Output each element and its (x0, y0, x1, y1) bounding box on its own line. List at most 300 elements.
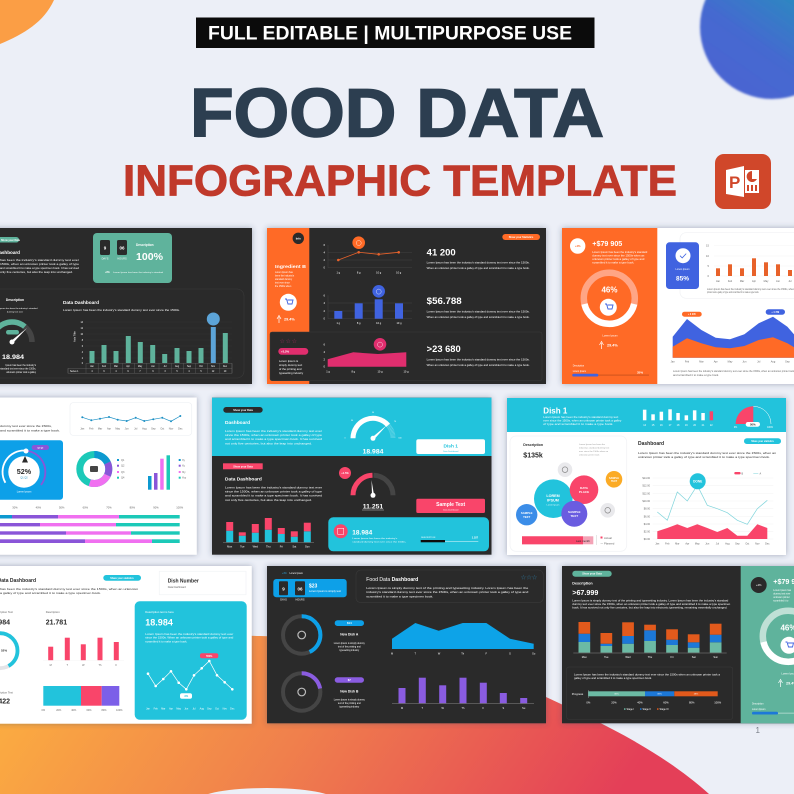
line chart panel: Mar (98, 428, 102, 430)
stacked bar chart: Thu (648, 655, 653, 659)
bar chart: 0 (323, 316, 325, 320)
slide 5: cyan and dark gauges (212, 398, 492, 555)
card: dish number (159, 571, 246, 595)
bar chart: data dashboard: Data Dashboard (63, 300, 99, 305)
area chart: Sep (785, 360, 790, 364)
stacked progress bar: 0% (41, 709, 46, 712)
combined area and line chart: $4.00 (644, 523, 651, 526)
bar chart: data dashboard: Jan (90, 366, 95, 368)
cyan text block: since the 1500s, when an unknown printer took a galley of type (225, 433, 323, 437)
orange side panel: 29.4% (607, 344, 618, 348)
bar chart panel: May (764, 280, 769, 283)
dish A text (334, 620, 366, 652)
stacked bar chart: Sun (305, 544, 310, 548)
small status line: +4% (282, 573, 287, 575)
pink gauge (339, 467, 393, 510)
cyan line chart card: Jun (184, 708, 189, 710)
small status line (282, 572, 303, 575)
green KPI card: HOURS (117, 256, 127, 260)
statistic 23 680: >23 680 (427, 344, 461, 354)
cyan header band: 17 (669, 424, 672, 427)
gauge block: dummy text ever (7, 310, 23, 314)
bar chart: data dashboard: Apr (126, 365, 130, 368)
bar chart: data dashboard: 4 (91, 371, 93, 373)
bar chart: data dashboard: 12 (212, 371, 215, 373)
bar chart: data dashboard: Aug (175, 365, 180, 368)
paragraph (0, 259, 80, 274)
outlined heading panel: industry's standard dummy text ever since the 1500s, when an unknown printer took a galley of type and (366, 590, 529, 594)
tag pill (0, 237, 21, 242)
card: sample text: Sample Text (436, 502, 466, 508)
progress panel: Lorem Ipsum has been the industry's standard dummy text ever since the 1500s when an unknown printer took a (574, 674, 721, 676)
green side panel: Lorem Ipsum has (773, 589, 792, 592)
paragraph (0, 425, 60, 432)
line chart: 1 g (336, 270, 341, 274)
dark text block: Lorem Ipsum has been the industry's standard dummy text ever (225, 486, 322, 490)
dish B text (334, 677, 366, 708)
left statistic and donut: 52% (1, 648, 7, 652)
bar chart: data dashboard: Oct (199, 365, 203, 368)
description text (572, 582, 731, 610)
bubble: lorem ipsum: LOREM (546, 494, 560, 498)
green KPI card: Lorem Ipsum has been the industry's standard (113, 271, 163, 274)
progress panel: Stage III (660, 708, 669, 711)
cyan header band: 14 (643, 424, 647, 427)
stacked bar chart: 100% (176, 506, 184, 510)
progress panel: galley of type and scrambled it to make a type specimen book. (574, 677, 652, 680)
outlined heading panel: Food Data Dashboard (366, 577, 418, 583)
line chart: 10 g (376, 270, 382, 274)
area chart: S (509, 652, 511, 656)
stacked bar chart: Mon (227, 544, 233, 548)
stacked bar chart: 80% (130, 506, 136, 510)
bar chart: Th (462, 707, 465, 710)
area chart: Mar (699, 360, 704, 364)
outlined heading panel: ☆☆☆ (520, 574, 538, 582)
bar chart: data dashboard: 6 (103, 371, 105, 373)
blue gauge card: 52% (17, 467, 32, 476)
cyan KPI card: standard dummy text ever since the 1500s. (352, 540, 407, 544)
pink tag (223, 463, 263, 469)
slide 3: orange donut with bar and area charts (562, 228, 794, 384)
cyan header band: ever since the 1500s, when an unknown printer took a galley (543, 420, 622, 422)
bubble: amber sample text: TEXT (611, 480, 618, 483)
line chart panel: Jan (80, 428, 85, 430)
cyan header band: of type and scrambled it to make a type book. (543, 423, 614, 426)
heading and paragraph: Share your statistics (110, 577, 134, 580)
gauge block (0, 298, 38, 374)
gauge: 0% (734, 427, 737, 429)
bar chart: data dashboard: 7 (139, 371, 141, 373)
dark text block: not only five centuries, but also the leap into unchanged. (225, 498, 312, 502)
statistic 56.788: $56.788 (427, 296, 462, 306)
progress panel: Stage II (642, 708, 651, 711)
outlined heading panel (356, 570, 543, 603)
progress panel: 60% (663, 700, 669, 704)
description text: >67.999 (572, 590, 598, 597)
blue countdown card: Lorem Ipsum is simply text (309, 590, 341, 593)
cyan line chart card: Jan (146, 708, 151, 710)
orange side panel (562, 228, 657, 384)
bubble: lorem ipsum (534, 479, 573, 518)
orange side panel (267, 228, 309, 384)
stacked bar chart (223, 518, 314, 548)
blue KPI card (666, 242, 699, 289)
bar chart: data dashboard: Jul (164, 366, 167, 368)
decorative blue corner blob (700, 0, 794, 99)
area chart: 2 (323, 358, 325, 362)
orange side panel: standard dummy (275, 278, 293, 281)
blue gauge card: Q1 Q2 (37, 448, 44, 450)
orange side panel: dummy text ever since the 1500s when an (592, 254, 645, 258)
combined area and line chart: Jan (655, 542, 660, 546)
bar chart: data dashboard: Axis Title (72, 331, 76, 342)
green side panel: unknown printer (773, 596, 790, 599)
cyan header band: 16 (660, 424, 663, 427)
cyan KPI card (328, 517, 489, 551)
area chart: 6 (323, 342, 325, 346)
line chart panel: Aug (142, 428, 147, 430)
combined area and line chart: Apr (685, 542, 689, 546)
stacked bar chart: Fri (670, 655, 674, 659)
white gauge (344, 412, 403, 456)
donut chart (584, 273, 635, 324)
combined area and line chart: Aug (725, 542, 730, 546)
green side panel: Lorem Ipsum (752, 708, 765, 711)
cyan line chart card: Oct (215, 708, 219, 710)
bubble: lorem ipsum: IPSUM (547, 498, 559, 502)
tag pill: Show your Data (1, 239, 21, 242)
white gauge: 100 (398, 438, 403, 440)
stacked progress bar (41, 686, 123, 712)
stacked bar chart: 90% (153, 506, 159, 510)
area chart: Jan (671, 360, 675, 364)
bubbles card: industry's standard dummy text (579, 446, 610, 450)
small bar chart (148, 455, 187, 490)
pink tag: Show your Data (233, 464, 253, 468)
stacked bar chart: Tue (604, 655, 609, 659)
bar chart: data dashboard: 6 (82, 346, 84, 348)
green tag: Show your Data (582, 572, 602, 576)
combined area and line chart: $2.00 (644, 531, 651, 534)
progress bar: Last month (576, 539, 590, 543)
bar chart: data dashboard: 4 (188, 371, 190, 373)
line chart (323, 236, 412, 274)
small bar chart: Xiy (182, 471, 186, 474)
cyan KPI card: DESCRIPTION (421, 537, 436, 539)
gauge: 50% (750, 422, 756, 426)
top banner: FULL EDITABLE | MULTIPURPOSE USE (208, 22, 572, 44)
stacked bar chart: Mon (582, 655, 587, 659)
progress bar: Actual (604, 536, 612, 540)
area chart: 10 g (377, 370, 383, 374)
gauge block: Ipsum has been the industry's (6, 364, 37, 367)
line chart: 8 g (357, 270, 361, 274)
combined area and line chart: Mar (675, 542, 680, 546)
bar chart: 8 g (357, 321, 361, 325)
combined area and line chart: Oct (745, 542, 750, 546)
area chart: Su (532, 652, 536, 656)
blue countdown card (273, 579, 347, 602)
bar chart: W (82, 664, 85, 667)
bar chart panel: Feb (728, 280, 733, 283)
donut chart: Q2 (121, 465, 125, 468)
orange side panel: been the industry's (275, 274, 295, 278)
small status line: Lorem Ipsum (290, 572, 303, 575)
bar chart: data dashboard: Mar (114, 365, 118, 368)
white gauge: 70 (394, 421, 397, 423)
slide 9: dark stacked bars and green side panel (562, 566, 794, 723)
combined area and line chart: Jul (716, 542, 719, 546)
area chart (391, 623, 536, 656)
card: sample text: Data Dashboard (443, 508, 459, 512)
progress bar (522, 535, 615, 546)
decorative orange to red bottom shape (0, 635, 709, 794)
white gauge: 18.984 (363, 448, 384, 456)
cyan KPI card: Lorem Ipsum has been the industry's (352, 537, 398, 540)
bubbles card: Lorem Ipsum has been the (579, 443, 606, 446)
bar chart panel: printer took a galley of type and scrambled it to make a type book. (707, 291, 759, 294)
paragraph: has been the industry's standard dummy text ever (0, 259, 79, 262)
icon: PowerPoint (715, 154, 771, 209)
dark pill (223, 407, 263, 413)
ring chart B (283, 673, 320, 711)
green KPI card: DAYS (102, 256, 109, 260)
bar chart: F (116, 664, 118, 667)
bar chart: data dashboard: 14 (80, 322, 84, 324)
area chart: + 3 245 (688, 313, 696, 316)
slide 4: white dashboard with gauge and stacked bars (0, 398, 197, 555)
stars and change pill: typesetting industry (279, 371, 304, 375)
bar chart: data dashboard: 10 (80, 334, 84, 336)
stars and change pill (278, 338, 308, 375)
bubble: data place (570, 475, 598, 504)
cyan text block: and scrambled it to make a type specimen book. It has survived (225, 437, 323, 441)
dish B text: Lorem Ipsum is simply dummy (334, 699, 366, 702)
bar chart: data dashboard: Series 1 (70, 370, 79, 373)
stars and change pill: ☆☆☆ (280, 338, 297, 345)
green KPI card: +8% (105, 272, 110, 274)
cyan line chart card: 18.984 (145, 618, 173, 628)
progress panel: Stage I (626, 708, 634, 711)
heading and paragraph: a galley of type and scrambled it to make a type specimen book. (0, 592, 101, 595)
cyan line chart card: Feb (154, 708, 158, 710)
combined area and line chart: A (760, 472, 762, 476)
card: dish number: Dish Number (168, 578, 199, 584)
dish A text: Lorem Ipsum is simply dummy (334, 642, 366, 645)
bubble: data place: DATA (580, 486, 589, 490)
cyan line chart card: Lorem Ipsum has been the industry's standard dummy text ever (145, 633, 234, 636)
orange side panel: scrambled it to make a type book. (592, 262, 635, 264)
orange side panel: +4% (575, 244, 581, 248)
combined area and line chart (642, 472, 773, 546)
title: FOOD DATA (190, 74, 604, 151)
area chart: Lorem Ipsum has been the industry's standard dummy text ever since the 1500s, when an unknown printer took (673, 370, 794, 373)
orange side panel: Description (573, 364, 585, 368)
bar chart: data dashboard: 5 (176, 371, 178, 373)
paragraph: dummy text ever since the 1500s, (0, 425, 52, 428)
dark text block: Data Dashboard (225, 476, 262, 482)
bar chart: 10 g (376, 321, 382, 325)
bar chart: data dashboard: 4 (82, 352, 84, 354)
dark pill: Show your Data (233, 408, 253, 412)
slides grid (0, 228, 794, 724)
stacked bar chart: 40% (36, 506, 42, 510)
white gauge: 30 (351, 420, 354, 422)
bar chart (323, 285, 412, 325)
stacked bar chart: Wed (253, 544, 258, 548)
bar chart: 6 (323, 294, 325, 298)
bar chart: 2 (323, 309, 325, 313)
orange side panel: 35% (637, 370, 643, 374)
small bar chart: Xy (182, 459, 186, 462)
green tag (572, 571, 612, 577)
cyan header band: 20 (693, 424, 697, 427)
area chart: Feb (685, 360, 690, 364)
stacked bar chart: 50% (59, 506, 65, 510)
blue countdown card: 06 (297, 586, 303, 592)
cyan line chart card: scrambled it to make a type book. (145, 640, 188, 644)
bar chart: F (483, 707, 485, 710)
line chart panel (70, 403, 192, 435)
gauge block: standard text ever since the 1500s, (0, 368, 36, 370)
dish A text: $14 (347, 621, 352, 625)
slide 6: dish bubbles and area chart (507, 398, 786, 555)
area chart: and scrambled it to make a type book. (673, 374, 719, 377)
bar chart: data dashboard: 4 (115, 371, 117, 373)
bar chart: data dashboard (63, 300, 232, 373)
bar chart: Su (522, 707, 526, 710)
bar chart: Description (46, 610, 60, 614)
stars and change pill: Lorem Ipsum is (279, 359, 299, 363)
bar chart: M (50, 664, 52, 667)
blue gauge card: Q1 Q2 (20, 476, 28, 480)
line chart: 10 g (396, 270, 402, 274)
bar chart: data dashboard: 6 (152, 371, 154, 373)
slide 7: white data dashboard (0, 566, 252, 724)
blue gauge card (0, 440, 63, 500)
bar chart: data dashboard: 2 (82, 358, 84, 360)
blue countdown card: HOURS (295, 598, 305, 602)
dish B text: text of the printing and (338, 702, 361, 705)
bar chart: 1 g (336, 321, 341, 325)
dark text block: since the 1500s, when an unknown printer took a galley of type (225, 490, 323, 494)
bubble: blue sample text (516, 504, 537, 525)
orange side panel: the 1500s when (275, 285, 292, 288)
bar chart: W (442, 707, 445, 710)
outlined heading panel: scrambled it to make a type specimen book. (366, 594, 434, 598)
bar chart panel: 5 (708, 264, 710, 268)
line chart panel: Jun (125, 428, 129, 430)
orange side panel: Lorem Ipsum (573, 370, 586, 373)
statistic 56.788: When an unknown printer took a galley of type and scrambled it to make a type book. (427, 316, 530, 319)
combined area and line chart: $6.00 (644, 515, 651, 518)
area chart: 0 (323, 364, 325, 368)
bubbles card: ever since the 1500s when an (579, 450, 609, 453)
gauge: 100% (767, 427, 773, 429)
statistic 56.788: Lorem Ipsum has been the industry's standard dummy text ever since the 1500s. (427, 310, 530, 314)
bar chart: T (67, 664, 69, 667)
area chart: Jun (742, 360, 747, 364)
statistic 23 680: When an unknown printer took a galley of type and scrambled it to make a type book. (427, 364, 530, 367)
orange side panel: Lorem Ipsum has been the industry's standard (592, 251, 648, 254)
stars and change pill: of the printing and (279, 367, 302, 371)
area chart: + 4 789 (771, 311, 780, 314)
statistic 23 680 (427, 344, 530, 367)
stacked bar chart: Sat (292, 544, 297, 548)
bar chart: data dashboard: Nov (211, 366, 216, 368)
bar chart panel: Jun (776, 280, 781, 283)
bubble: amber sample text: SAMPLE (609, 477, 619, 480)
bar chart: data dashboard: May (138, 366, 143, 368)
bar chart: data dashboard: Feb (102, 366, 107, 368)
bar chart: Th (99, 664, 102, 667)
stacked bar chart: Wed (625, 655, 631, 659)
bubble: blue sample text: TEXT (523, 515, 531, 519)
decorative white bottom ellipse (199, 788, 335, 794)
cyan KPI card: 1.187 (472, 536, 479, 539)
blue countdown card: 9 (282, 586, 285, 592)
orange side panel: Lorem Ipsum (602, 334, 618, 338)
cyan line chart card: since the 1500s. When an unknown printer took a galley of type and (145, 636, 234, 640)
statistics pill: Show your Statistics (509, 236, 534, 239)
dashboard heading (638, 438, 781, 459)
green side panel: Description (752, 702, 764, 706)
progress panel: 36% (614, 694, 619, 696)
bar chart panel: Jul (788, 280, 792, 283)
bar chart: S (502, 707, 504, 710)
line chart: 2 (323, 258, 325, 262)
dashboard heading: unknown printer took a galley of type and scrambled it to make a type specimen book. (638, 456, 770, 459)
blue KPI card: 85% (676, 276, 689, 282)
stacked bar chart: Sat (692, 655, 696, 659)
dashboard heading: Lorem Ipsum has been the industry's standard dummy text ever since the 1500s, when an (638, 452, 777, 455)
statistics pill (502, 234, 540, 240)
progress panel: 80% (689, 700, 695, 704)
progress bar: Planned (604, 542, 615, 546)
bubbles card: Description (523, 443, 543, 447)
stacked progress bar: 40% (71, 709, 77, 712)
small bar chart: Xy (182, 465, 186, 468)
green side panel (741, 566, 794, 723)
line chart: 0 (323, 266, 325, 270)
statistic 56.788 (427, 296, 530, 319)
dark text block: and scrambled it to make a type specimen book. It has survived (225, 494, 323, 498)
combined area and line chart: $12.00 (642, 485, 651, 488)
bubble: data place: PLACE (579, 490, 589, 494)
bar chart: T (422, 707, 424, 710)
dashboard heading: Dashboard (638, 441, 664, 447)
statistic 41 200: When an unknown printer took a galley of type and scrambled it to make a type book. (427, 267, 530, 270)
donut chart: Q4 (121, 477, 125, 480)
blue countdown card: $23 (309, 584, 318, 590)
combined area and line chart: Dec (765, 542, 770, 546)
gauge block: unknown printer took a galley (6, 371, 37, 374)
card: dish number: Data Dashboard (168, 586, 187, 589)
cyan line chart card: Dec (230, 708, 235, 710)
line chart: 6 (323, 243, 325, 247)
bubble: purple sample text (561, 501, 587, 527)
stacked bar chart: Tue (240, 544, 245, 548)
bar chart: data dashboard: 8 (82, 340, 84, 342)
description text: Description (572, 582, 593, 586)
bar chart (392, 678, 534, 710)
bar chart: M (401, 707, 403, 710)
cyan header band: 19 (685, 424, 688, 427)
bar chart: data dashboard: Lorem Ipsum has been the industry's standard dummy text ever since the 1500s. (63, 308, 180, 312)
cyan header band: 15 (652, 424, 655, 427)
stacked bar chart (573, 622, 727, 659)
